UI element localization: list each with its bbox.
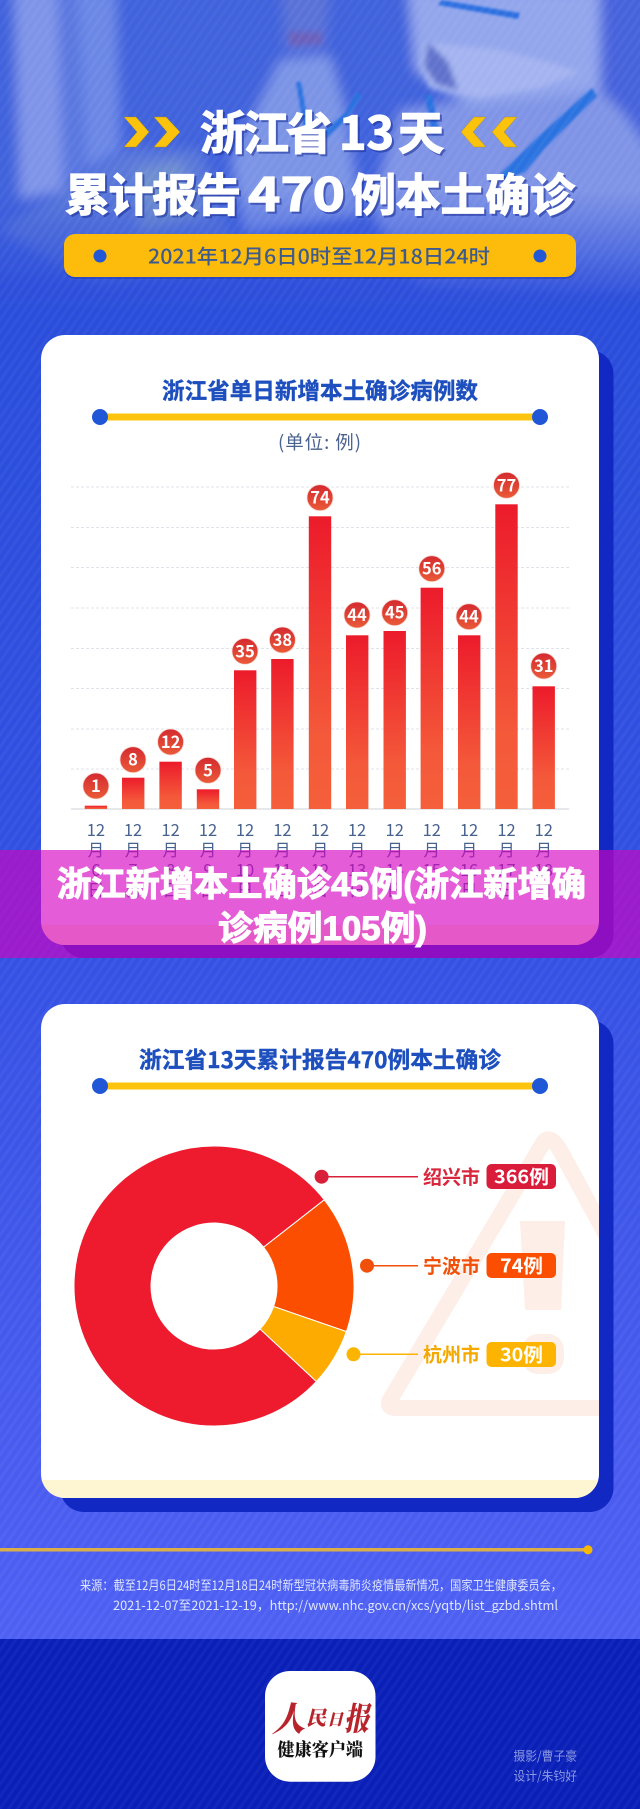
- chart heading: 浙江省13天累计报告470例本土确诊: [139, 1043, 501, 1075]
- panel shadow: [60, 1020, 614, 1512]
- chart heading: 浙江省单日新增本土确诊病例数: [162, 374, 478, 406]
- icon: right-pointing chevrons: [124, 117, 180, 147]
- date axis labels: 12: [497, 817, 516, 841]
- date pill: 2021年12月6日0时至12月18日24时: [148, 240, 490, 270]
- date axis labels: 12: [386, 817, 404, 841]
- date axis labels: 月: [498, 837, 515, 861]
- source note: 2021-12-07至2021-12-19，http://www.nhc.gov.cn/xcs/yqtb/list_gzbd.shtml: [113, 1595, 558, 1614]
- legend: Ningbo 74: [360, 1250, 556, 1279]
- legend: Shaoxing 366: 绍兴市: [423, 1161, 480, 1190]
- legend: Ningbo 74: 74例: [500, 1252, 543, 1278]
- date axis labels: 日: [535, 877, 552, 901]
- date axis labels: 日: [88, 877, 104, 901]
- date axis labels: 12: [124, 817, 142, 841]
- date axis labels: 12: [311, 857, 329, 881]
- date axis labels: 日: [312, 877, 328, 901]
- date axis labels: 日: [237, 877, 253, 901]
- footer divider: [0, 1545, 592, 1554]
- value labels: 74: [310, 485, 330, 509]
- date axis labels: 月: [461, 837, 477, 861]
- banner text: 诊病例105例): [218, 910, 427, 948]
- panel card: [41, 335, 599, 945]
- logo wordmark: 人: [272, 1692, 305, 1741]
- title line 2: [65, 159, 576, 225]
- logo subtitle: 健康客户端: [278, 1736, 363, 1762]
- date axis labels: 10: [236, 857, 254, 881]
- date axis labels: 8: [166, 857, 175, 881]
- date axis labels: 12: [236, 817, 254, 841]
- heading rule: [92, 409, 548, 425]
- value labels: 77: [497, 472, 516, 496]
- date axis labels: 16: [460, 857, 478, 881]
- credits: [514, 1746, 577, 1784]
- bars: [85, 504, 555, 809]
- date axis labels: 日: [461, 877, 477, 901]
- date axis labels: 日: [162, 877, 179, 901]
- date axis labels: 月: [125, 837, 141, 861]
- logo wordmark: [272, 1692, 372, 1741]
- date pill: [64, 234, 576, 279]
- icon: left-pointing chevrons: [461, 117, 517, 147]
- date axis labels: 月: [162, 837, 179, 861]
- legend: Hangzhou 30: 杭州市: [423, 1338, 480, 1368]
- legend: Ningbo 74: 宁波市: [423, 1250, 480, 1279]
- date axis labels: 月: [349, 837, 365, 861]
- background photo: medical staff in protective suits: [0, 0, 640, 300]
- title line 1: 浙江省: [200, 98, 332, 164]
- date axis labels: 15: [423, 857, 441, 881]
- value labels: 31: [534, 653, 553, 677]
- date axis labels: 日: [274, 877, 291, 901]
- credits: 设计/朱钧好: [514, 1766, 577, 1784]
- date axis labels: [87, 817, 553, 901]
- value labels: 35: [235, 638, 255, 662]
- title line 1: [200, 98, 444, 164]
- date axis labels: 12: [273, 817, 292, 841]
- logo wordmark: 日: [327, 1707, 344, 1730]
- date axis labels: 13: [348, 857, 366, 881]
- date axis labels: 6: [91, 857, 100, 881]
- date axis labels: 月: [535, 837, 552, 861]
- date axis labels: 11: [273, 857, 292, 881]
- date axis labels: 12: [460, 817, 478, 841]
- banner text: 浙江新增本土确诊45例(浙江新增确: [57, 866, 586, 904]
- date axis labels: 日: [349, 877, 365, 901]
- value labels: 5: [203, 757, 213, 781]
- panel: daily new cases bar chart: [41, 335, 614, 958]
- value labels: 1: [91, 773, 101, 797]
- value labels: 12: [161, 729, 180, 753]
- title line 1: 13: [339, 98, 394, 164]
- logo wordmark: 民: [306, 1702, 328, 1731]
- icon: faint warning triangle watermark: [389, 1139, 640, 1408]
- logo wordmark: 报: [344, 1694, 372, 1740]
- date axis labels: 17: [497, 857, 516, 881]
- overlay caption banner: [0, 850, 640, 958]
- title line 2: 470: [248, 159, 345, 225]
- grid lines: [71, 487, 569, 769]
- panel shadow: [60, 350, 614, 958]
- date axis labels: 月: [274, 837, 291, 861]
- date axis labels: 月: [237, 837, 253, 861]
- date axis labels: 月: [424, 837, 440, 861]
- value badges: [83, 472, 557, 799]
- date axis labels: 月: [386, 837, 403, 861]
- date axis labels: 月: [312, 837, 328, 861]
- date axis labels: 12: [161, 817, 180, 841]
- banner text: [57, 866, 586, 948]
- date axis labels: 9: [203, 857, 213, 881]
- date axis labels: 18: [535, 857, 553, 881]
- title line 2: 累计报告: [65, 159, 241, 224]
- source note: [80, 1575, 562, 1614]
- value labels: 45: [385, 600, 404, 624]
- slice: Shaoxing: [74, 1146, 324, 1426]
- date axis labels: 12: [311, 817, 329, 841]
- donut chart: [74, 1146, 354, 1426]
- panel: cumulative cases donut chart: [41, 1004, 640, 1512]
- date axis labels: 日: [386, 877, 403, 901]
- date axis labels: 12: [87, 817, 105, 841]
- date axis labels: 14: [386, 857, 404, 881]
- date axis labels: 12: [423, 817, 441, 841]
- footer band: [0, 1639, 640, 1809]
- logo: People's Daily Health app: [265, 1671, 376, 1782]
- date axis labels: 12: [348, 817, 366, 841]
- legend: Hangzhou 30: 30例: [500, 1340, 543, 1368]
- slice: Ningbo: [264, 1200, 354, 1332]
- unit label: (单位: 例): [278, 429, 361, 455]
- legend: Hangzhou 30: [346, 1338, 556, 1368]
- value labels: 44: [347, 602, 367, 626]
- heading rule: [92, 1078, 548, 1094]
- date axis labels: 月: [200, 837, 216, 861]
- date axis labels: 7: [128, 857, 138, 881]
- date axis labels: 日: [498, 877, 515, 901]
- title: [65, 98, 576, 225]
- date axis labels: 日: [424, 877, 440, 901]
- value labels: 56: [422, 556, 442, 580]
- credits: 摄影/曹子豪: [514, 1746, 577, 1764]
- date axis labels: 日: [125, 877, 141, 901]
- legend: Shaoxing 366: 366例: [494, 1162, 549, 1190]
- value labels: 8: [128, 747, 138, 771]
- value labels: 44: [459, 604, 479, 628]
- slice: Hangzhou: [260, 1306, 346, 1382]
- date axis labels: 日: [200, 877, 216, 901]
- legend: Shaoxing 366: [315, 1161, 556, 1190]
- date axis labels: 月: [88, 837, 104, 861]
- value labels: 38: [273, 627, 292, 651]
- title line 2: 例本土确诊: [351, 159, 576, 224]
- title line 1: 天: [398, 98, 444, 164]
- value labels: [91, 472, 553, 797]
- source note: 来源：截至12月6日24时至12月18日24时新型冠状病毒肺炎疫情最新情况，国家卫生健康委员会，: [80, 1575, 562, 1594]
- date axis labels: 12: [535, 817, 553, 841]
- date axis labels: 12: [199, 817, 217, 841]
- panel card: [41, 1004, 599, 1498]
